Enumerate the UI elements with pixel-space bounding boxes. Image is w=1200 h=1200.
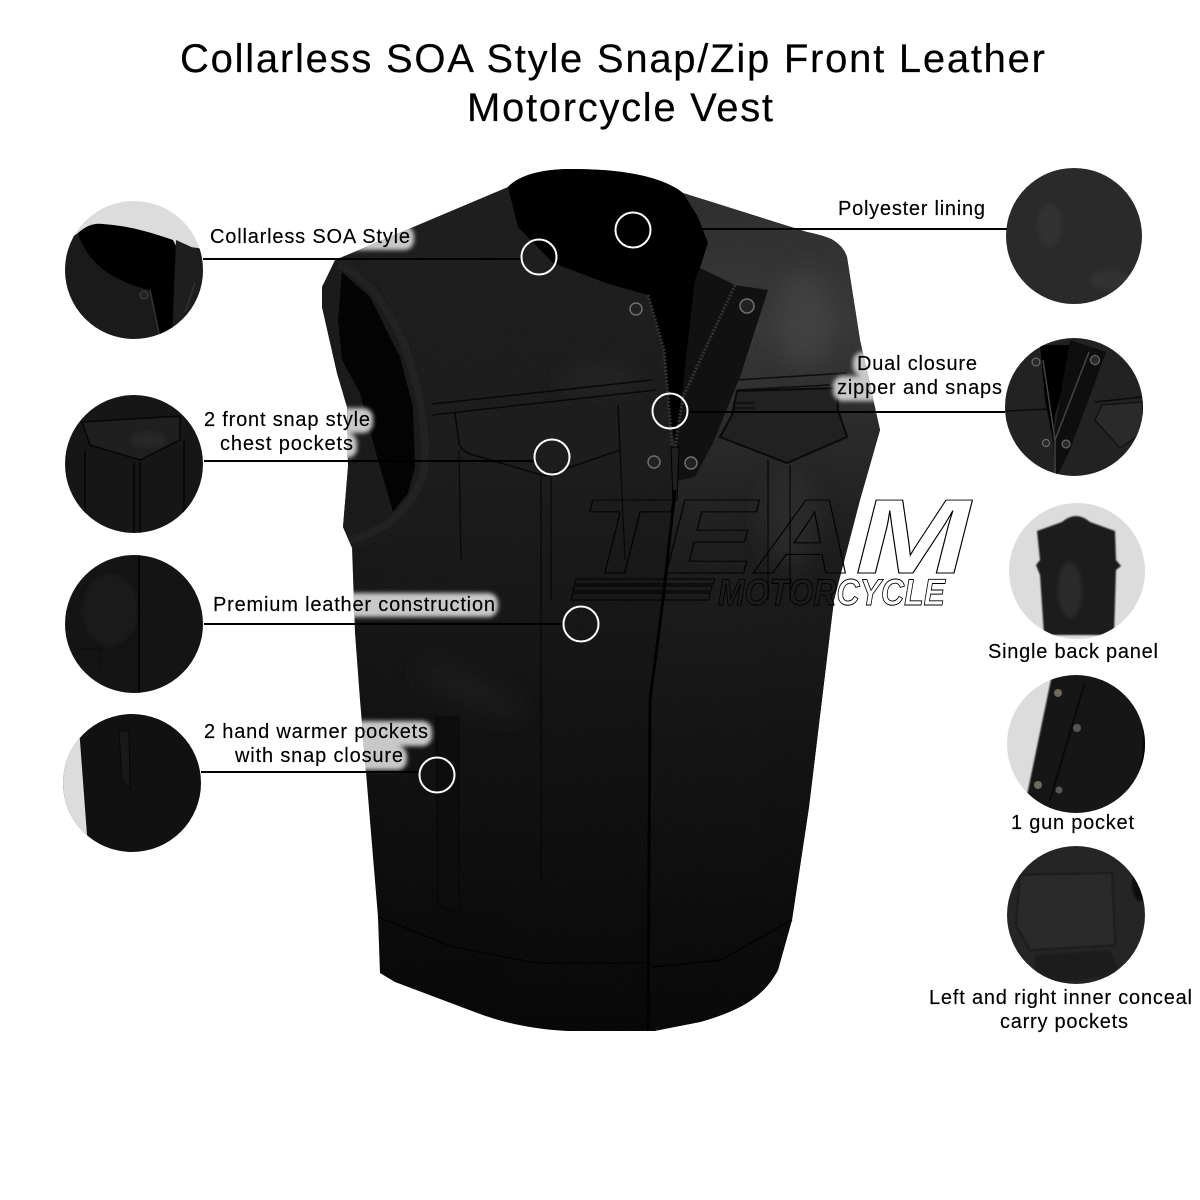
label <box>204 721 428 767</box>
right vest panel <box>648 193 880 1031</box>
watermark: TEAM MOTORCYCLE: TEAM <box>580 478 973 596</box>
marker ring <box>616 212 650 248</box>
detail: single back panel <box>988 500 1158 663</box>
label <box>204 409 370 455</box>
detail photo: collar <box>65 201 203 339</box>
label: Polyester lining <box>838 198 985 220</box>
label: Dual closure <box>857 353 977 375</box>
zipper fabric strip <box>672 268 768 482</box>
label: Single back panel <box>988 641 1158 663</box>
leader line <box>204 460 534 462</box>
title <box>180 37 1045 130</box>
label <box>837 353 1002 399</box>
leader line <box>651 228 1007 230</box>
title: Motorcycle Vest <box>467 86 773 130</box>
snap buttons <box>630 299 754 469</box>
label: 1 gun pocket <box>1011 812 1134 834</box>
main vest illustration <box>320 165 885 1035</box>
detail photo: hand pocket <box>63 714 201 852</box>
label: carry pockets <box>1000 1011 1128 1033</box>
label: 2 hand warmer pockets <box>204 721 428 743</box>
marker ring <box>420 758 454 792</box>
zipper <box>648 285 735 447</box>
detail photo: back of vest <box>1009 503 1145 639</box>
label: zipper and snaps <box>837 377 1002 399</box>
detail photo: conceal carry pocket <box>1007 846 1145 984</box>
vest body <box>322 169 880 1031</box>
hem seam <box>378 917 792 967</box>
leader line <box>204 623 563 625</box>
armhole opening <box>338 272 415 512</box>
neck opening <box>508 169 708 447</box>
leader line <box>688 411 1005 413</box>
grey label halos over the vest <box>346 227 874 774</box>
zipper pull <box>671 447 679 500</box>
watermark: TEAM MOTORCYCLE <box>571 478 973 613</box>
callout: dual closure <box>652 335 1150 480</box>
watermark: TEAM MOTORCYCLE: MOTORCYCLE <box>718 572 946 613</box>
callout: polyester lining <box>616 165 1150 310</box>
label: Collarless SOA Style <box>210 226 410 248</box>
callout: Collarless SOA Style <box>60 195 556 345</box>
detail: inner conceal carry pockets <box>929 840 1192 1033</box>
detail photo: zipper and snaps <box>1005 338 1143 476</box>
label: 2 front snap style <box>204 409 370 431</box>
label: Premium leather construction <box>213 594 495 616</box>
back panel seen through armhole <box>322 262 430 548</box>
callout: chest pockets <box>60 390 570 540</box>
detail photo: lining <box>1006 168 1142 304</box>
marker ring <box>534 440 570 474</box>
callout: premium leather <box>60 550 598 700</box>
detail: gun pocket <box>1007 675 1145 834</box>
marker ring <box>564 606 598 642</box>
callout: hand warmer pockets <box>60 710 454 860</box>
hand warmer pocket <box>436 717 459 913</box>
detail photo: chest pocket <box>65 395 203 533</box>
right yoke seam <box>733 373 847 408</box>
leader line <box>201 771 419 773</box>
label: Left and right inner conceal <box>929 987 1192 1009</box>
front closure seam <box>648 490 675 1030</box>
title: Collarless SOA Style Snap/Zip Front Leather <box>180 37 1045 81</box>
leader line <box>203 258 522 260</box>
label <box>929 987 1192 1033</box>
label: chest pockets <box>220 433 353 455</box>
detail photo: gun pocket <box>1007 675 1145 813</box>
pocket and placket stitching <box>459 450 790 880</box>
soft leather highlights <box>320 165 885 1035</box>
detail photo: leather <box>65 555 203 693</box>
left yoke stitching <box>432 380 656 415</box>
armhole trim <box>338 264 425 540</box>
marker ring <box>522 240 556 274</box>
marker ring <box>652 394 688 428</box>
left chest pocket flap <box>455 405 620 476</box>
right chest pocket flap <box>720 388 847 463</box>
label: with snap closure <box>234 745 403 767</box>
